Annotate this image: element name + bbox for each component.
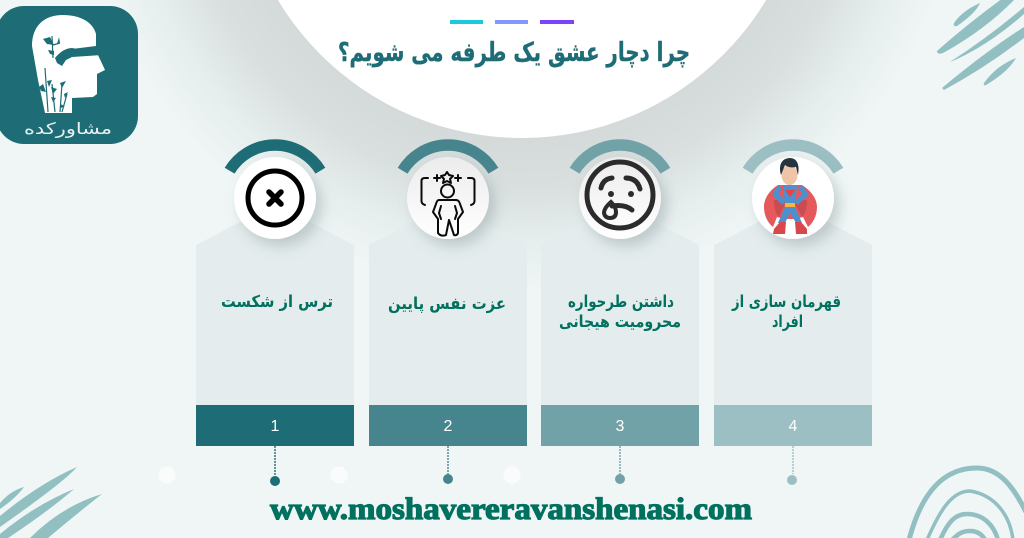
label 3: داشتن طرحواره <box>568 292 674 312</box>
icon: x in circle <box>248 171 302 225</box>
connector 1 <box>270 446 280 486</box>
number band 3 <box>541 405 699 446</box>
panel: 4 idealizing people <box>714 145 872 405</box>
brush strokes bottom left <box>0 467 102 538</box>
logo wordmark: مشاورکده <box>24 119 112 139</box>
label 2: عزت نفس پایین <box>388 294 506 314</box>
icon: person with star <box>422 172 474 236</box>
label 1: ترس از شکست <box>221 292 333 312</box>
icon: superhero <box>764 158 817 234</box>
icon: head profile with hand and plants <box>32 15 105 113</box>
label 3 second line: محرومیت هیجانی <box>559 312 681 332</box>
logo: مشاورکده <box>0 6 138 144</box>
faint white dots <box>158 466 520 484</box>
panel: 2 low self-esteem <box>369 145 527 405</box>
connector 3 <box>615 446 625 484</box>
panel: 3 emotional deprivation <box>541 145 699 405</box>
title: چرا دچار عشق یک طرفه می شویم؟ <box>338 38 690 68</box>
decorative accent dashes <box>450 20 574 24</box>
website url: www.moshavereravanshenasi.com <box>270 491 752 526</box>
number band 4 <box>714 405 872 446</box>
top white semicircle <box>237 0 807 138</box>
concentric arcs bottom right <box>909 468 1024 538</box>
connector 4 <box>787 446 797 485</box>
number band 3: 3 <box>616 418 625 435</box>
number band 4: 4 <box>789 418 798 435</box>
brush strokes top right <box>937 0 1024 90</box>
connector 2 <box>443 446 453 484</box>
number band 1: 1 <box>271 418 280 435</box>
number band 2 <box>369 405 527 446</box>
icon: crying face <box>587 162 653 228</box>
number band 1 <box>196 405 354 446</box>
panel: 1 fear of failure <box>196 145 354 486</box>
label 4 second line: افراد <box>772 312 803 332</box>
number band 2: 2 <box>444 418 453 435</box>
label 4: قهرمان سازی از <box>731 292 841 312</box>
